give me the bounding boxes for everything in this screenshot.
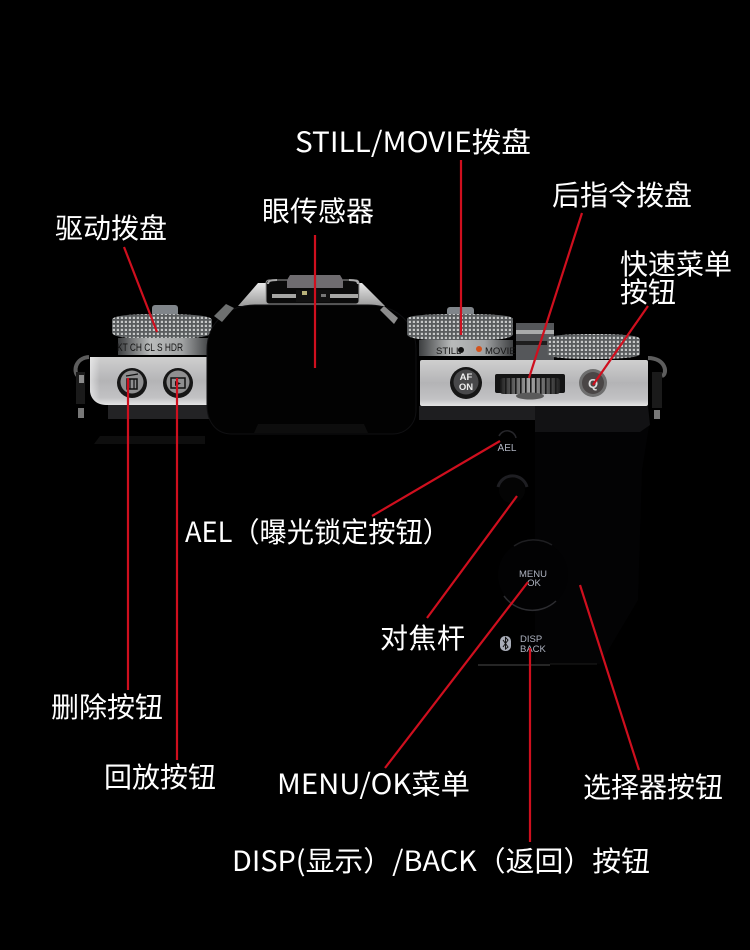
left strap lug — [76, 357, 89, 418]
middle dial stack — [516, 323, 554, 360]
left silver plate — [90, 357, 210, 444]
bluetooth and DISP BACK button — [478, 634, 597, 665]
label: menu ok: MENU/OK菜单 — [277, 763, 470, 803]
label: delete button: 删除按钮 — [51, 686, 163, 726]
still movie dial: STILL — [436, 346, 461, 357]
Q button: Q — [588, 376, 598, 391]
label: rear command dial: 后指令拨盘 — [552, 174, 692, 214]
focus lever — [498, 476, 527, 503]
right silver plate — [419, 360, 650, 432]
AEL button: AEL — [498, 443, 517, 454]
AF-ON button: AF — [460, 372, 473, 383]
delete button — [117, 368, 147, 398]
label: quick menu button: 快速菜单 — [620, 243, 732, 283]
camera body — [76, 275, 665, 665]
label: quick menu button — [620, 243, 732, 311]
bluetooth and DISP BACK button: BACK — [520, 644, 547, 655]
callout lines — [124, 160, 648, 842]
label: still movie dial: STILL/MOVIE拨盘 — [295, 121, 531, 161]
exposure dial — [547, 334, 640, 359]
rear command dial — [495, 374, 565, 400]
bluetooth and DISP BACK button: DISP — [520, 634, 542, 645]
playback button — [163, 368, 193, 398]
label: disp back: DISP(显示）/BACK（返回）按钮 — [232, 840, 650, 880]
grip — [535, 420, 650, 664]
eyecup — [207, 304, 416, 434]
right strap lug — [648, 358, 665, 419]
label: quick menu button: 按钮 — [620, 271, 676, 311]
left drive dial: KT CH CL S HDR — [117, 342, 183, 354]
label: eye sensor: 眼传感器 — [262, 190, 374, 230]
still movie dial — [407, 307, 516, 357]
left drive dial — [112, 305, 212, 355]
still movie dial: MOVIE — [485, 346, 516, 357]
label: focus lever: 对焦杆 — [380, 617, 465, 657]
label: selector button: 选择器按钮 — [583, 766, 723, 806]
label: drive dial: 驱动拨盘 — [55, 207, 167, 247]
AF-ON button: ON — [459, 382, 473, 393]
menu ok selector: MENU — [519, 569, 547, 580]
AEL button — [498, 431, 517, 454]
menu ok selector: OK — [527, 578, 542, 589]
menu ok selector — [498, 540, 568, 610]
Q button — [579, 369, 607, 397]
label: playback button: 回放按钮 — [104, 756, 216, 796]
AF-ON button — [450, 367, 482, 399]
hot shoe housing — [238, 275, 385, 306]
label: AEL: AEL（曝光锁定按钮） — [185, 511, 450, 551]
